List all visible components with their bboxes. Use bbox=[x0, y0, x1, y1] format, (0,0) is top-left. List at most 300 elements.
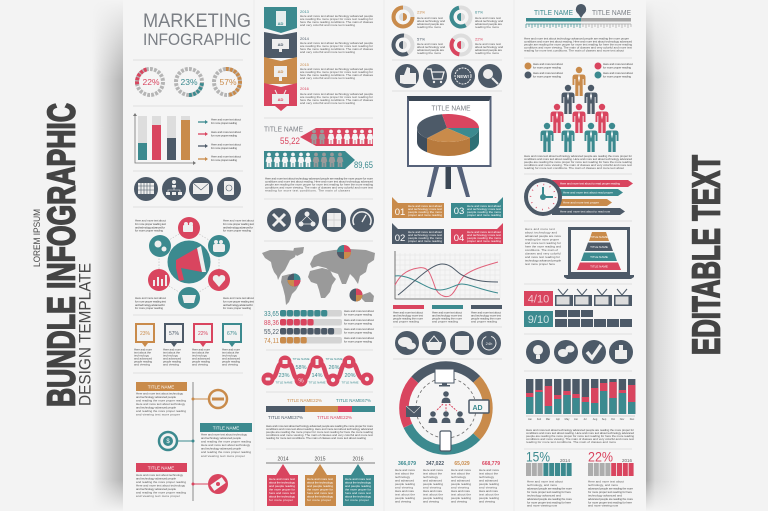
wave process diagram: 20% bbox=[344, 373, 356, 379]
presentation board with 3D pie chart bbox=[407, 96, 491, 197]
four figures with text: text about the bbox=[479, 492, 499, 496]
numbered ribbons: proper and more reading bbox=[408, 239, 442, 243]
year callouts: 2016 bbox=[352, 456, 364, 462]
paragraph bbox=[265, 176, 373, 192]
percent blocks: 15% bbox=[526, 448, 550, 464]
paragraph: people are reading the more proper for more text reading for here the more reading bbox=[266, 430, 373, 434]
four figures with text: and viewing bbox=[479, 500, 495, 504]
year callouts: and people reading bbox=[345, 484, 371, 488]
numbered ribbons: 02 bbox=[395, 233, 405, 244]
paragraph: conditions and more text about reading. Here and more text about technology advanced bbox=[524, 40, 632, 44]
bar chart: for more proper reading bbox=[211, 158, 237, 162]
four figures with text: Here and more bbox=[395, 468, 415, 472]
icon row: thumbs up, cart, badge, search: NEW! bbox=[457, 74, 469, 79]
vertical timeline: and viewing text more proper bbox=[136, 494, 180, 498]
stacked bar chart: Jan bbox=[528, 418, 533, 421]
legend: for more proper reading bbox=[603, 66, 631, 70]
paragraph: conditions and more text about reading. Here and more text about technology advanced bbox=[526, 431, 634, 435]
four figures with text: technology bbox=[423, 475, 438, 479]
four figures with text: 65,029 bbox=[454, 461, 470, 467]
icon row: tools, network, puzzle, gauge bbox=[267, 208, 374, 232]
page shadow: right bbox=[646, 0, 682, 511]
four figures with text: and advanced bbox=[395, 478, 414, 482]
percent blocks: technology advanced and bbox=[527, 494, 561, 498]
ring stats: about technology and bbox=[475, 45, 503, 49]
year ribbon: and very colorful and more text reading bbox=[300, 23, 355, 27]
percentage callouts: and advanced bbox=[134, 356, 152, 360]
text beside laptop: reading the more proper bbox=[525, 238, 559, 242]
four figures with text: people reading bbox=[451, 482, 471, 486]
ring stats: advanced people are bbox=[417, 48, 444, 52]
segmented bar with labels: TITLE NAME22% bbox=[287, 398, 322, 403]
title bbox=[143, 10, 251, 49]
legend: Here and more text about bbox=[603, 71, 633, 75]
year callouts: here and more text bbox=[269, 491, 295, 495]
text beside laptop: classes and very colorful bbox=[525, 252, 561, 256]
year callouts bbox=[266, 456, 375, 506]
year ribbon: 2016 bbox=[300, 86, 310, 91]
hub diagram with megaphone: and technology advanced for bbox=[135, 303, 165, 307]
wave process diagram: 23% bbox=[278, 373, 290, 379]
title: INFOGRAPHIC bbox=[143, 30, 251, 49]
stacked bar chart: Jun bbox=[574, 418, 579, 421]
percentage callouts: and advanced bbox=[222, 356, 240, 360]
progress rows: Here and more text about bbox=[344, 318, 374, 322]
paragraph: conditions and more viewing. The main of classes and very colorful and more text bbox=[265, 186, 373, 190]
template sheet bbox=[123, 0, 646, 511]
percentage callouts: technology bbox=[222, 354, 238, 358]
progress rows bbox=[264, 309, 374, 345]
vertical timeline: Here and more text about technology bbox=[136, 402, 186, 406]
donut gauges bbox=[135, 67, 241, 97]
progress rows: for more proper reading bbox=[344, 340, 372, 344]
percentage callouts: 23% bbox=[140, 331, 151, 337]
numbered ribbons: Here and more text about bbox=[467, 230, 501, 234]
clock with arrow ribbons: Here and more text about read proper bbox=[563, 190, 613, 194]
paragraph: Here and more text about technology advanced people are reading the more proper for bbox=[524, 154, 632, 158]
wave process diagram: TITLE NAME bbox=[308, 380, 326, 384]
percent blocks: Here and more text about bbox=[588, 480, 624, 484]
icon row: calendar, org chart, mail, clipboard bbox=[134, 177, 241, 201]
people comparison banners: TITLE NAME bbox=[264, 124, 303, 134]
stacked bar chart bbox=[526, 379, 635, 421]
wave process diagram: % bbox=[298, 378, 304, 384]
segmented bar with labels: TITLE NAME37% bbox=[268, 415, 303, 420]
paragraph bbox=[524, 154, 632, 170]
ring stats bbox=[390, 4, 503, 58]
four figures with text: and viewing bbox=[451, 486, 469, 490]
segmented bar with labels: TITLE NAME22% bbox=[317, 415, 352, 420]
hub diagram with megaphone: for more proper reading bbox=[223, 228, 251, 232]
hub diagram with megaphone: for more proper reading bbox=[135, 306, 163, 310]
percent blocks: 22% bbox=[588, 448, 613, 464]
year ribbon: Here and more text about technology advanced people bbox=[300, 92, 373, 96]
paragraph: reading for more text conditions. The main of classes bbox=[265, 188, 350, 192]
bar chart: Here and more text about bbox=[211, 154, 241, 158]
ring stats: Here and more text bbox=[417, 16, 443, 20]
percentage callouts: and advanced bbox=[163, 356, 181, 360]
stacked bar chart: Dec bbox=[630, 418, 635, 421]
paragraph: conditions and more text about reading. Here and more text about technology advanced bbox=[265, 180, 373, 184]
progress rows: Here and more text about bbox=[344, 336, 374, 340]
percent blocks: technology advanced and bbox=[588, 494, 622, 498]
percentage callouts: and viewing bbox=[192, 362, 208, 366]
percent blocks: and more viewing now bbox=[588, 504, 619, 508]
ring stats: reading the more bbox=[417, 51, 441, 55]
vertical timeline: and reading the more proper reading bbox=[136, 490, 186, 494]
percentage callouts bbox=[134, 324, 241, 366]
stacked bar chart: Feb bbox=[537, 418, 542, 421]
hub diagram with megaphone: for more proper reading bbox=[135, 228, 163, 232]
hub diagram with megaphone: and technology advanced for bbox=[223, 226, 253, 230]
vertical timeline: TITLE NAME bbox=[148, 384, 174, 390]
year ribbon: 2015 bbox=[300, 62, 310, 67]
four figures with text: people reading bbox=[395, 496, 415, 500]
legend: for more proper reading bbox=[533, 74, 561, 78]
vertical timeline: and technology advanced people bbox=[136, 406, 176, 410]
paragraph: people are reading the more proper for more text reading for here the more reading bbox=[265, 182, 373, 186]
year ribbon: Here and more text about technology advanced people bbox=[300, 67, 373, 71]
hub diagram with megaphone: Here and more text about bbox=[135, 218, 166, 222]
year callouts: Here and more text bbox=[345, 477, 371, 481]
vertical timeline: Here and more text about technology bbox=[136, 473, 184, 477]
year ribbon: here the more reading conditions. The main of classes bbox=[300, 47, 374, 51]
bar chart: for more proper reading bbox=[211, 134, 237, 138]
numbered ribbons: people reading the more bbox=[467, 236, 501, 240]
vertical timeline: and viewing text more proper bbox=[136, 412, 180, 416]
bar chart: Here and more text about bbox=[211, 118, 241, 122]
ring stats: reading the more bbox=[475, 51, 499, 55]
four figures with text: people reading bbox=[479, 496, 499, 500]
four figures with text: and viewing bbox=[423, 500, 439, 504]
percentage callouts: 22% bbox=[198, 331, 209, 337]
numbered ribbons: 01 bbox=[395, 207, 405, 218]
stacked bar chart: Sep bbox=[602, 418, 607, 421]
line chart: and proper reading bbox=[393, 320, 419, 324]
four figures with text: and advanced bbox=[423, 478, 442, 482]
year callouts: about the technology bbox=[307, 480, 334, 484]
stacked bar chart: Oct bbox=[611, 418, 615, 421]
stacked bar chart: Jul bbox=[583, 418, 587, 421]
people comparison banners: 89,65 bbox=[354, 160, 373, 171]
panel: column four bbox=[524, 4, 635, 507]
four figures with text: Here and more bbox=[479, 468, 499, 472]
year callouts: the more proper for bbox=[345, 488, 371, 492]
progress rows: 33,65 bbox=[264, 311, 279, 318]
percentage callouts: text about the bbox=[222, 350, 239, 354]
numbered ribbons: and technology more text bbox=[408, 207, 442, 211]
year ribbon: are reading the more proper for more text reading for bbox=[300, 95, 373, 99]
vertical timeline: and technology advanced people bbox=[201, 446, 241, 450]
hub diagram with megaphone: Here and more text about bbox=[223, 218, 254, 222]
hub diagram with megaphone: for more proper reading bbox=[223, 306, 251, 310]
ring stats: reading the more bbox=[417, 25, 441, 29]
year callouts: the more proper for bbox=[269, 488, 295, 492]
year ribbon: and very colorful and more text reading bbox=[300, 50, 355, 54]
year callouts: Here and more text bbox=[307, 477, 333, 481]
year ribbon: Here and more text about technology advanced people bbox=[300, 41, 373, 45]
stacked bar chart: Aug bbox=[593, 418, 598, 421]
clock with arrow ribbons bbox=[526, 180, 633, 215]
text beside laptop: advanced people are more bbox=[525, 234, 561, 238]
year callouts: 2015 bbox=[314, 456, 326, 462]
percent blocks: for more proper text reading for here bbox=[527, 500, 571, 504]
paragraph: conditions and more viewing. The main of classes and very colorful and more text bbox=[526, 437, 634, 441]
percentage callouts: people reading bbox=[192, 360, 210, 364]
panel: column three bbox=[390, 4, 503, 503]
panel: column one bbox=[133, 10, 254, 501]
vertical timeline: and technology advanced people bbox=[136, 395, 176, 399]
line chart: Here and more text about bbox=[471, 310, 501, 314]
four figures with text: text about the bbox=[395, 492, 415, 496]
percentage callouts: 57% bbox=[169, 331, 180, 337]
paragraph: conditions and more viewing. The main of classes and very colorful and more text bbox=[524, 46, 632, 50]
percentage callouts: Here and more bbox=[134, 348, 152, 352]
donut gauges: 23% bbox=[180, 77, 198, 87]
percent blocks: technology, and more bbox=[527, 483, 557, 487]
hub diagram with megaphone bbox=[135, 217, 254, 310]
year ribbon: are reading the more proper for more text reading for bbox=[300, 70, 373, 74]
ring stats: 23% bbox=[417, 10, 425, 14]
percentage callouts: technology bbox=[192, 354, 208, 358]
numbered ribbons: people reading the more bbox=[408, 210, 442, 214]
year callouts: here and more text bbox=[345, 491, 371, 495]
year callouts: here and more text bbox=[307, 491, 333, 495]
four figures with text: Here and more bbox=[451, 489, 470, 493]
numbered ribbons: and technology more text bbox=[408, 233, 442, 237]
year ribbon: AD bbox=[278, 69, 283, 74]
segmented bar with labels bbox=[266, 398, 375, 420]
vertical timeline: Here and more text about technology bbox=[136, 392, 184, 396]
circular network diagram: AD bbox=[472, 405, 483, 412]
year callouts: 2014 bbox=[277, 456, 289, 462]
bar chart: for more proper reading bbox=[211, 146, 237, 150]
percentage callouts: 67% bbox=[227, 331, 238, 337]
hub diagram with megaphone: for more proper reading text bbox=[223, 300, 254, 304]
vertical timeline: and technology advanced people bbox=[136, 487, 176, 491]
icon row: chat, basket, square, refresh bbox=[395, 331, 501, 355]
four figures with text: text about the bbox=[423, 492, 443, 496]
ring stats: advanced people are bbox=[417, 22, 444, 26]
percentage callouts: technology bbox=[134, 354, 150, 358]
four figures with text: and viewing bbox=[395, 486, 413, 490]
paragraph: Here and more text about technology advanced people are reading the more proper for more bbox=[266, 424, 373, 428]
percent blocks: advanced people are reading the more bbox=[527, 486, 572, 490]
year callouts: about the technology bbox=[345, 494, 372, 498]
four figures with text: 668,779 bbox=[482, 461, 500, 467]
four figures with text: Here and more bbox=[479, 489, 498, 493]
ring stats: 57% bbox=[417, 36, 425, 42]
four figures with text: and viewing bbox=[395, 500, 411, 504]
paragraph: conditions and more viewing. The main of classes and very colorful and more text bbox=[266, 433, 373, 437]
percentage callouts: and viewing bbox=[163, 362, 179, 366]
progress rows: Here and more text about bbox=[344, 309, 374, 313]
ring stats: 22% bbox=[475, 36, 483, 42]
world map with pie markers bbox=[262, 245, 375, 305]
laptop with pyramid: TITLE NAME bbox=[590, 235, 608, 239]
four figures with text: and advanced bbox=[451, 478, 470, 482]
vertical timeline: and reading the more proper reading bbox=[136, 409, 186, 413]
four figures with text: technology bbox=[395, 475, 410, 479]
slider header bbox=[526, 4, 631, 28]
wave process diagram: TITLE NAME bbox=[341, 380, 359, 384]
percent blocks: for more proper text reading for here bbox=[588, 500, 632, 504]
icon row: thumbs up, cart, badge, search bbox=[395, 64, 502, 88]
ring stats: 67% bbox=[475, 10, 483, 14]
paragraph: conditions and more text about reading. Here and more text about technology advanced bbox=[266, 427, 373, 431]
percent blocks bbox=[526, 448, 634, 508]
paragraph: people are reading the more proper for more text reading for here the more reading bbox=[524, 160, 632, 164]
ring stats: advanced people are bbox=[475, 48, 502, 52]
paragraph bbox=[266, 424, 373, 440]
vertical timeline: and technology advanced people bbox=[201, 436, 241, 440]
paragraph bbox=[524, 36, 632, 52]
four figures with text bbox=[395, 461, 500, 504]
presentation board with 3D pie chart: TITLE NAME bbox=[432, 106, 471, 112]
year callouts: and people reading bbox=[307, 484, 333, 488]
percentage callouts: Here and more bbox=[163, 348, 181, 352]
four figures with text: and advanced bbox=[479, 478, 498, 482]
line chart: people reading the more bbox=[471, 316, 501, 320]
vertical timeline: and reading the more proper reading bbox=[201, 440, 251, 444]
score rows with TV icons bbox=[524, 289, 632, 327]
percent blocks: for more proper text reading for here bbox=[527, 490, 571, 494]
text beside laptop: technology advanced people bbox=[525, 258, 561, 262]
page shadow: left bbox=[92, 0, 123, 511]
ring stats: Here and more text bbox=[475, 42, 501, 46]
paragraph: conditions and more viewing. The main of classes and very colorful and more text bbox=[524, 163, 632, 167]
legend: for more proper reading bbox=[603, 74, 631, 78]
vertical timeline bbox=[136, 382, 252, 501]
hub diagram with megaphone: and technology advanced for bbox=[135, 226, 165, 230]
score rows with TV icons: 9/10 bbox=[528, 314, 549, 326]
hub diagram with megaphone: for more proper reading text bbox=[135, 222, 166, 226]
circular network diagram bbox=[404, 366, 489, 451]
vertical timeline: Here and more text about technology bbox=[201, 432, 248, 436]
text beside laptop: conditions. The main of bbox=[525, 248, 558, 252]
stacked bar chart: Mar bbox=[546, 418, 550, 421]
side heading: editable text: EDITABLE TEXT bbox=[686, 155, 728, 355]
vertical timeline: and reading the more proper reading bbox=[136, 398, 186, 402]
year ribbon: 2013 bbox=[300, 9, 310, 14]
ring stats: about technology and bbox=[417, 19, 445, 23]
year ribbon: Here and more text about technology advanced people bbox=[300, 14, 373, 18]
four figures with text: Here and more bbox=[423, 489, 442, 493]
paragraph: reading for more text conditions. The main of classes and more text about bbox=[524, 166, 624, 170]
laptop with pyramid: TITLE NAME bbox=[590, 245, 608, 249]
paragraph bbox=[526, 428, 634, 444]
paragraph: reading for more text conditions. The main of classes and more bbox=[526, 440, 616, 444]
progress rows: 74,11 bbox=[264, 338, 279, 345]
stacked bar chart: May bbox=[565, 418, 570, 421]
legend bbox=[524, 62, 633, 78]
line chart bbox=[393, 251, 502, 324]
percentage callouts: text about the bbox=[192, 350, 209, 354]
percentage callouts: text about the bbox=[134, 350, 151, 354]
four figures with text: text about the bbox=[451, 492, 471, 496]
numbered ribbons: proper and more reading bbox=[408, 213, 442, 217]
four figures with text: text about the bbox=[423, 472, 442, 476]
ring stats: about technology and bbox=[417, 45, 445, 49]
year callouts: the more proper for bbox=[307, 488, 333, 492]
text beside laptop: Here and more text bbox=[525, 227, 555, 231]
ring stats: reading the more bbox=[475, 25, 499, 29]
year ribbon: and very colorful and more text reading bbox=[300, 101, 355, 105]
progress rows: 88,36 bbox=[264, 320, 279, 327]
hub diagram with megaphone: for more proper reading text bbox=[135, 300, 166, 304]
text beside laptop: here the more reading and bbox=[525, 244, 561, 248]
line chart: and proper reading bbox=[471, 320, 497, 324]
slider header: TITLE NAME bbox=[534, 8, 573, 17]
icon row: chat, basket, square, refresh: 24h bbox=[486, 341, 492, 346]
four figures with text: text about the bbox=[395, 472, 414, 476]
year ribbon: and very colorful and more text reading bbox=[300, 76, 355, 80]
percentage callouts: people reading bbox=[134, 360, 152, 364]
people pyramid bbox=[540, 67, 618, 152]
four figures with text: text about the bbox=[479, 472, 498, 476]
bar chart: Here and more text about bbox=[211, 142, 241, 146]
clock with arrow ribbons: Here and more text about to read proper reading bbox=[560, 182, 620, 186]
year callouts: and people reading bbox=[269, 484, 295, 488]
numbered ribbons: Here and more text about bbox=[467, 204, 501, 208]
vertical timeline: and technology advanced people bbox=[136, 476, 176, 480]
wave process diagram: TITLE NAME bbox=[292, 357, 310, 361]
year callouts: for more proper bbox=[345, 498, 369, 502]
year ribbon: AD bbox=[278, 97, 283, 102]
four figures with text: people reading bbox=[479, 482, 499, 486]
four figures with text: technology bbox=[479, 475, 494, 479]
numbered ribbons: people reading the more bbox=[467, 210, 501, 214]
year callouts: Here and more text bbox=[269, 477, 295, 481]
paragraph: reading for more text conditions. The main of classes and more text about bbox=[524, 48, 624, 52]
numbered ribbons: 03 bbox=[454, 206, 464, 217]
wave process diagram: TITLE NAME bbox=[275, 380, 293, 384]
ring stats: Here and more text bbox=[417, 42, 443, 46]
progress rows: 55,22 bbox=[264, 329, 279, 336]
four figures with text: 347,022 bbox=[426, 461, 444, 467]
year callouts: about the technology bbox=[269, 494, 296, 498]
numbered ribbons: Here and more text about bbox=[408, 230, 442, 234]
percent blocks: technology, and more bbox=[588, 483, 618, 487]
numbered ribbons: and technology more text bbox=[467, 207, 501, 211]
four figures with text: people reading bbox=[423, 496, 443, 500]
wave process diagram: TITLE NAME bbox=[325, 357, 343, 361]
four figures with text: and viewing bbox=[423, 486, 441, 490]
vertical timeline: TITLE NAME bbox=[148, 466, 174, 470]
numbered ribbons: proper and more reading bbox=[467, 239, 501, 243]
year ribbon: AD bbox=[278, 42, 283, 47]
four figures with text: Here and more bbox=[423, 468, 443, 472]
four figures with text: and viewing bbox=[451, 500, 467, 504]
percentage callouts: Here and more bbox=[222, 348, 240, 352]
wave process diagram: 26% bbox=[328, 365, 340, 371]
laptop with pyramid: TITLE NAME bbox=[590, 255, 608, 259]
hub diagram with megaphone: Here and more text about bbox=[223, 296, 254, 300]
people comparison banners: 55,22 bbox=[280, 136, 300, 147]
legend: Here and more text about bbox=[533, 71, 563, 75]
donut gauges: 57% bbox=[219, 77, 237, 87]
line chart: and technology more text bbox=[432, 314, 462, 318]
wave process diagram: 14% bbox=[311, 373, 323, 379]
vertical timeline: $ bbox=[166, 439, 170, 445]
numbered ribbons: Here and more text about bbox=[408, 204, 442, 208]
percentage callouts: people reading bbox=[163, 360, 181, 364]
side subheading: design template: DESIGN TEMPLATE bbox=[76, 263, 94, 406]
four figures with text: text about the bbox=[451, 472, 470, 476]
ring stats: advanced people are bbox=[475, 22, 502, 26]
vertical timeline: and viewing text more proper bbox=[201, 454, 245, 458]
percent blocks: 2014 bbox=[560, 458, 571, 463]
